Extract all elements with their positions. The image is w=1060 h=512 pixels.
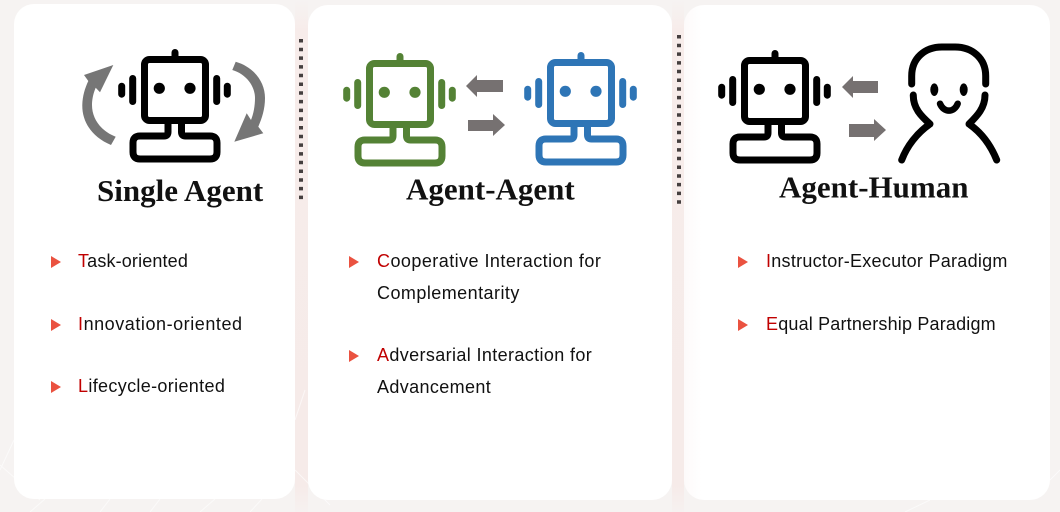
bullet marker [51, 381, 61, 393]
list item: adversarial interaction [377, 345, 592, 396]
bullet marker [349, 256, 359, 268]
list item: adversarial interaction: Adversarial Interaction for [377, 345, 592, 365]
list item: cooperative interaction [377, 251, 601, 303]
icon: green robot [347, 56, 452, 163]
list item: equal partnership: Equal Partnership Paradigm [766, 314, 996, 334]
list item: task-oriented: Task-oriented [78, 251, 188, 271]
dotted divider: right [677, 35, 681, 206]
list item: lifecycle-oriented: Lifecycle-oriented [78, 376, 225, 396]
icon: human [902, 47, 997, 160]
bullet marker [51, 319, 61, 331]
bullet marker [738, 319, 748, 331]
list item: cooperative interaction: Cooperative Interaction for [377, 251, 601, 271]
bullet marker [51, 256, 61, 268]
dotted divider: left [299, 39, 303, 202]
list item: innovation-oriented: Innovation-oriented [78, 314, 243, 334]
panel: single agent [14, 4, 295, 499]
heading: agent-agent: Agent-Agent [406, 172, 575, 206]
bullet marker [349, 350, 359, 362]
panel: agent-human [684, 5, 1050, 500]
icon: exchange arrows agent-agent [466, 75, 505, 136]
panel: agent-agent [308, 5, 672, 500]
list item: instructor-executor: Instructor-Executor Paradigm [766, 251, 1008, 271]
heading: agent-human: Agent-Human [779, 170, 968, 204]
icon: agent-human robot [722, 54, 827, 160]
icon: single agent robot [122, 52, 227, 159]
heading: single agent: Single Agent [97, 173, 264, 208]
list item: cooperative interaction: Complementarity [377, 282, 520, 302]
icon: exchange arrows agent-human [842, 76, 886, 141]
bullet marker [738, 256, 748, 268]
list item: adversarial interaction: Advancement [377, 376, 491, 396]
icon: blue robot [528, 56, 633, 162]
icon: cycle arrows [82, 62, 265, 145]
